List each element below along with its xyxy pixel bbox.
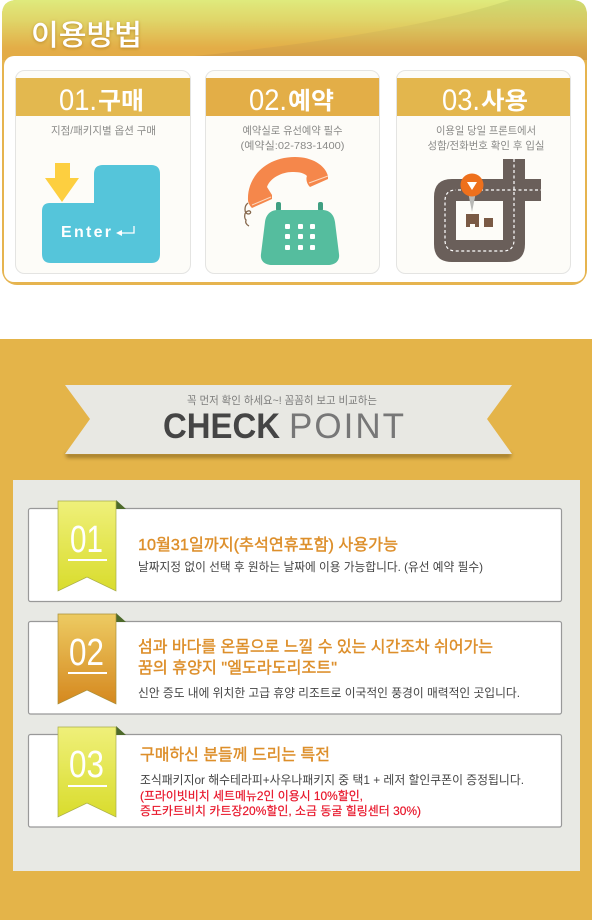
icon: enter key [42, 165, 160, 263]
item 01 [28, 500, 562, 602]
item 03 [28, 726, 562, 827]
panel: check point [0, 339, 592, 920]
card: 02 reservation [206, 70, 380, 274]
card heading: 구매 [98, 88, 144, 115]
ribbon 01 [58, 500, 126, 591]
item title: 섬과 바다를 온몸으로 느낄 수 있는 시간조차 쉬어가는 [138, 638, 493, 656]
item 02 [28, 613, 562, 714]
card heading band [16, 78, 190, 116]
card heading: 사용 [481, 88, 528, 115]
card description: 예약실로 유선예약 필수 [242, 124, 343, 137]
banner subtitle: 꼭 먼저 확인 하세요~! 꼼꼼히 보고 비교하는 [187, 393, 377, 407]
background [0, 339, 592, 920]
card heading [249, 84, 334, 117]
card: 02 reservation: (예약실:02-783-1400) [240, 139, 344, 152]
card: 03 use: 성함/전화번호 확인 후 입실 [428, 139, 544, 152]
banner: check point: POINT [289, 407, 404, 446]
card description: 지점/패키지별 옵션 구매 [51, 125, 156, 137]
card heading: 02. [249, 84, 287, 117]
icon: down arrow [45, 163, 79, 202]
banner: check point [65, 385, 512, 458]
card heading band [397, 78, 570, 116]
card heading [59, 84, 144, 117]
icon: telephone [245, 157, 339, 265]
item 03: 증도카트비치 카트장20%할인, 소금 동굴 힐링센터 30%) [140, 804, 421, 818]
banner title: CHECK [163, 407, 280, 446]
panel body [4, 56, 585, 282]
inner panel [13, 480, 580, 871]
item description: 신안 증도 내에 위치한 고급 휴양 리조트로 이국적인 풍경이 매력적인 곳입니다. [138, 686, 520, 700]
card heading: 01. [59, 84, 97, 117]
icon: enter key: Enter [61, 224, 111, 241]
item red note: (프라이빗비치 세트메뉴2인 이용시 10%할인, [140, 789, 363, 803]
icon: road map [434, 159, 541, 262]
panel header band [2, 0, 587, 285]
card description: 이용일 당일 프론트에서 [436, 124, 536, 137]
card heading band [206, 78, 379, 116]
heading: 이용방법: 이용방법 [31, 19, 142, 52]
item title: 10월31일까지(추석연휴포함) 사용가능 [138, 536, 398, 554]
card heading: 03. [442, 84, 480, 117]
card: 01 purchase [16, 70, 190, 274]
ribbon 01: 01 [70, 519, 103, 561]
ribbon 02: 02 [69, 632, 104, 674]
panel: how to use [2, 0, 587, 285]
ribbon 02 [58, 613, 126, 704]
card heading: 예약 [288, 88, 334, 115]
card heading [442, 84, 528, 117]
card: 03 use [396, 70, 570, 274]
item description: 조식패키지or 해수테라피+사우나패키지 중 택1 + 레저 할인쿠폰이 증정됩니다. [140, 773, 524, 787]
item description: 날짜지정 없이 선택 후 원하는 날짜에 이용 가능합니다. (유선 예약 필수) [138, 559, 483, 574]
ribbon 03 [58, 726, 126, 817]
item 02: 꿈의 휴양지 "엘도라도리조트" [138, 659, 337, 677]
item title: 구매하신 분들께 드리는 특전 [140, 746, 330, 764]
ribbon 03: 03 [69, 744, 104, 786]
